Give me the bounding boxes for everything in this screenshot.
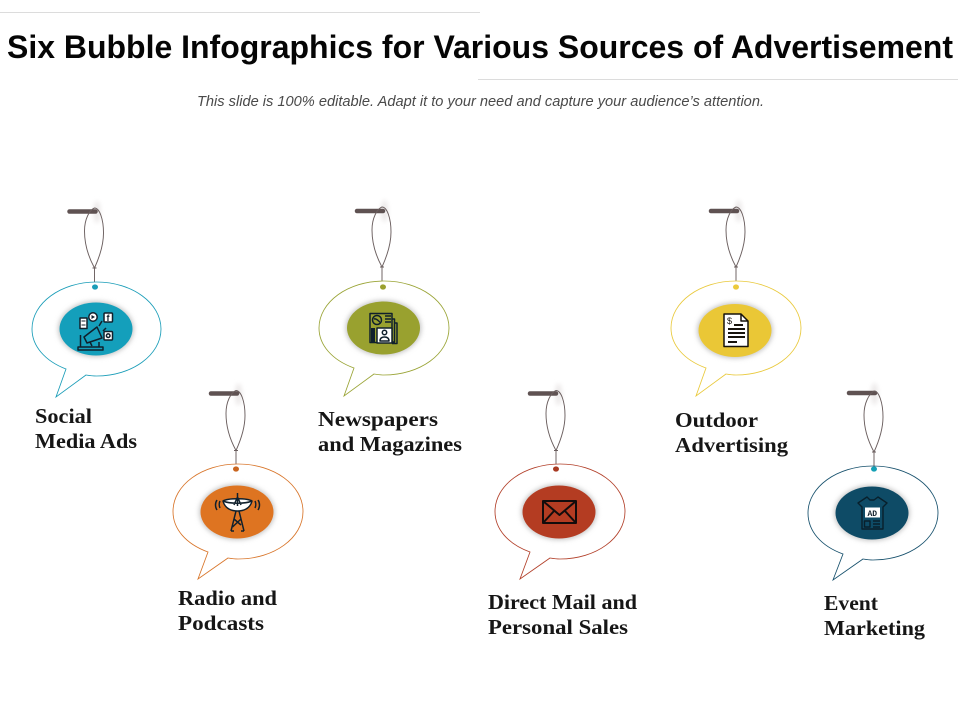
hanger: outdoor advertising: [711, 200, 745, 286]
label: newspapers and magazines: [318, 407, 462, 456]
hanger: social media ads: [70, 201, 104, 287]
panel: direct mail and personal sales: [495, 384, 625, 579]
hanger: newspapers and magazines: [357, 200, 391, 286]
label: social media ads: Media Ads: [35, 429, 137, 453]
title: Six Bubble Infographics for Various Sources of Advertisement: [7, 29, 953, 65]
hanger: event marketing: [849, 383, 883, 471]
panel: newspapers and magazines: [319, 200, 449, 396]
icon: invoice document: $: [727, 316, 732, 326]
label: radio and podcasts: [178, 586, 277, 635]
label: newspapers and magazines: Newspapers: [318, 407, 438, 431]
speech bubble: radio and podcasts: [173, 464, 303, 579]
label: newspapers and magazines: and Magazines: [318, 432, 462, 456]
label: direct mail and personal sales: Personal Sales: [488, 615, 628, 639]
speech bubble: event marketing: [808, 466, 938, 580]
icon: envelope: [543, 501, 576, 523]
hanger: radio and podcasts: [211, 384, 245, 470]
speech bubble: newspapers and magazines: [319, 281, 449, 396]
speech bubble: social media ads: [32, 282, 161, 397]
label: social media ads: Social: [35, 404, 92, 428]
label: direct mail and personal sales: Direct Mail and: [488, 590, 637, 614]
panel: event marketing: [808, 383, 938, 580]
icon: megaphone and social media: f: [106, 313, 110, 323]
label: event marketing: Event: [824, 591, 879, 615]
icon: event ad board: [858, 497, 887, 529]
icon: invoice document: [724, 314, 748, 346]
label: direct mail and personal sales: [488, 590, 637, 639]
icon: newspaper: [370, 314, 397, 344]
label: radio and podcasts: Podcasts: [178, 611, 264, 635]
label: radio and podcasts: Radio and: [178, 586, 277, 610]
speech bubble: direct mail and personal sales: [495, 464, 625, 579]
label: outdoor advertising: [675, 408, 788, 457]
panel: radio and podcasts: [173, 384, 303, 579]
icon: event ad board: AD: [868, 510, 877, 519]
label: event marketing: [824, 591, 925, 640]
icon: megaphone and social media: [78, 313, 112, 350]
hanger: direct mail and personal sales: [530, 384, 565, 470]
icon: radio tower: [216, 493, 260, 531]
label: event marketing: Marketing: [824, 616, 925, 640]
subtitle: This slide is 100% editable. Adapt it to your need and capture your audience’s attention.: [197, 94, 764, 110]
speech bubble: outdoor advertising: [671, 281, 801, 396]
panel: social media ads: [32, 201, 161, 397]
label: outdoor advertising: Advertising: [675, 433, 788, 457]
label: social media ads: [35, 404, 137, 453]
label: outdoor advertising: Outdoor: [675, 408, 758, 432]
panel: outdoor advertising: [671, 200, 801, 396]
